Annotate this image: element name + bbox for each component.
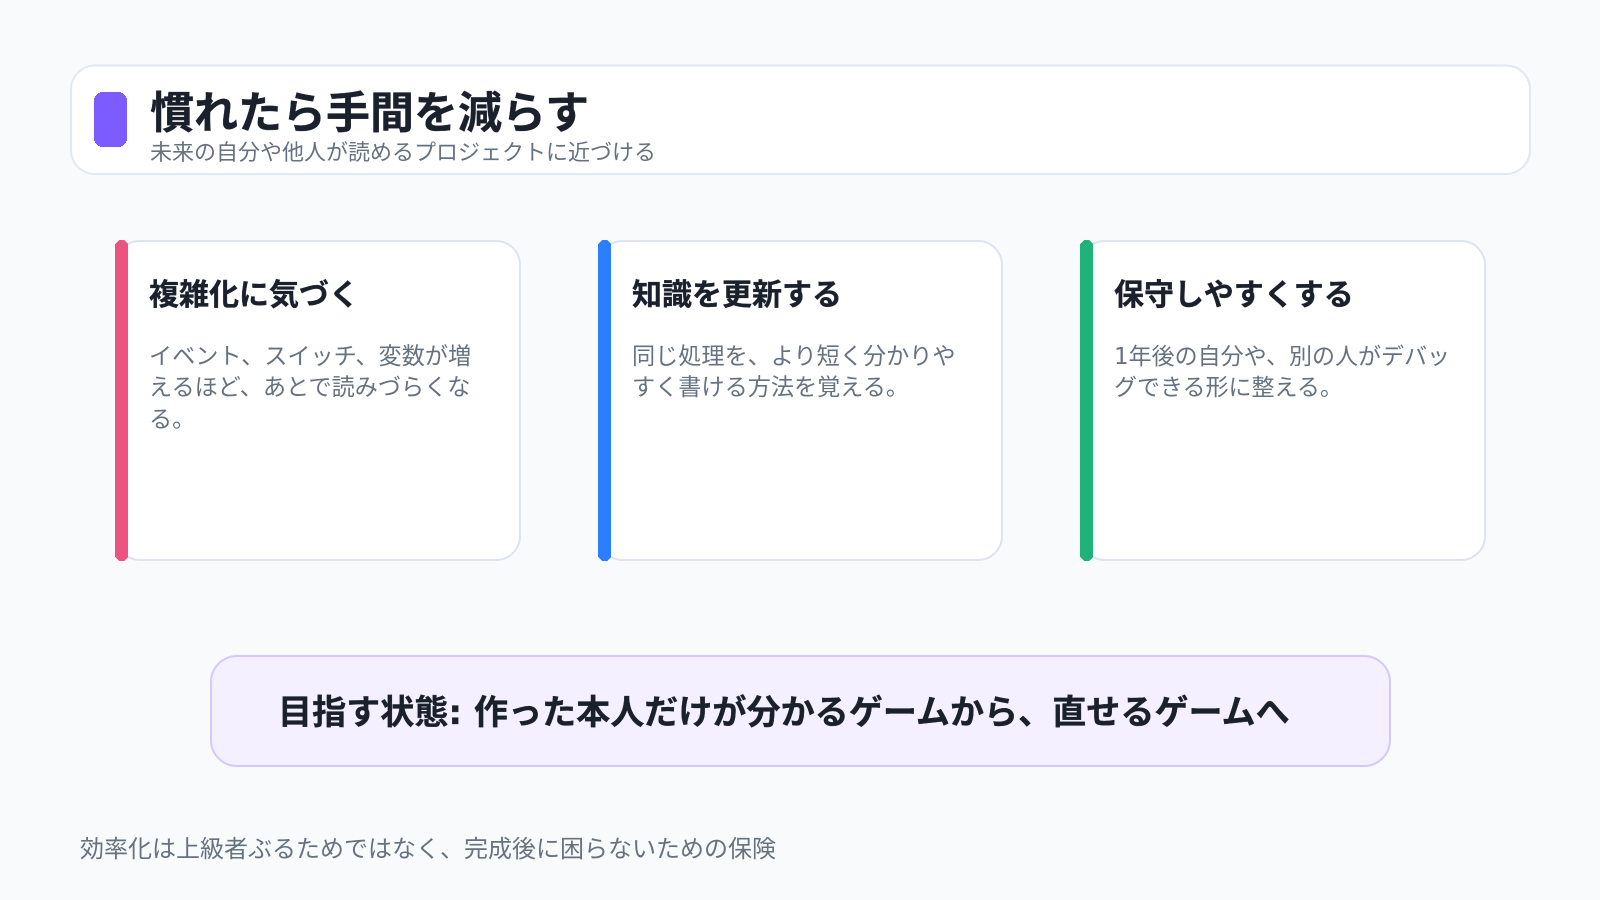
callout text: 目指す状態: 作った本人だけが分かるゲームから、直せるゲームへ (278, 693, 1290, 733)
card heading: 知識を更新する (632, 278, 842, 313)
accent bar: blue (598, 240, 611, 561)
panel: 複雑化に気づく (115, 240, 520, 561)
card body: えるほど、あとで読みづらくな (149, 375, 470, 401)
panel: 知識を更新する (598, 240, 1002, 561)
panel: 保守しやすくする (1080, 240, 1485, 561)
title: 慣れたら手間を減らす (150, 88, 589, 139)
accent bar: pink (115, 240, 128, 561)
card body: 同じ処理を、より短く分かりや (632, 344, 956, 370)
accent bar: green (1080, 240, 1093, 561)
card body: すく書ける方法を覚える。 (632, 375, 909, 401)
subtitle: 未来の自分や他人が読めるプロジェクトに近づける (150, 141, 656, 166)
card body: 1年後の自分や、別の人がデバッ (1114, 344, 1450, 370)
card heading: 複雑化に気づく (149, 278, 359, 313)
card body: る。 (149, 407, 195, 433)
footer note: 効率化は上級者ぶるためではなく、完成後に困らないための保険 (80, 835, 776, 863)
card heading: 保守しやすくする (1114, 278, 1354, 313)
card body: グできる形に整える。 (1114, 375, 1343, 401)
header panel (71, 66, 1530, 174)
callout: goal banner (211, 656, 1390, 766)
card body: イベント、スイッチ、変数が増 (149, 344, 471, 370)
icon: purple accent chip (94, 92, 127, 147)
